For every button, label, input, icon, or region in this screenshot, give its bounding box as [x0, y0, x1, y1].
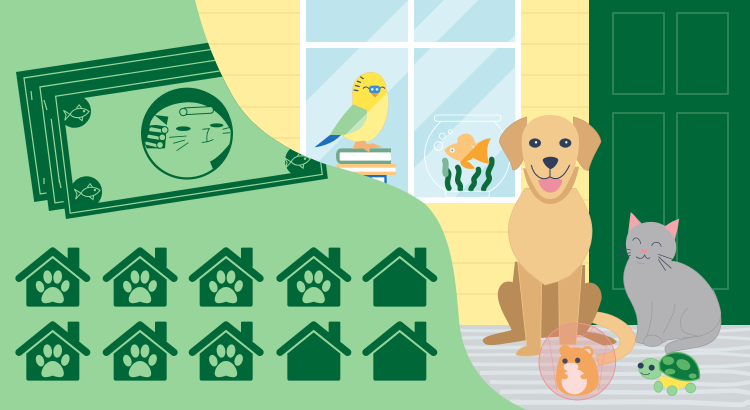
floor [440, 325, 750, 410]
turtle [638, 353, 700, 396]
legs [516, 262, 542, 356]
ball [539, 323, 616, 400]
plants [445, 159, 492, 189]
dollar bills [16, 32, 328, 219]
hamster ball [539, 323, 616, 400]
chest [508, 188, 592, 285]
books [336, 148, 396, 187]
tail [590, 312, 635, 366]
bird [314, 72, 388, 153]
cat medallion [141, 88, 233, 180]
house 2 with paw [106, 248, 174, 307]
house 1 with paw [19, 248, 87, 307]
window [300, 0, 521, 203]
house icons grid [19, 248, 434, 381]
bowl [425, 115, 510, 197]
cat [615, 212, 721, 354]
house 3 with paw [192, 248, 260, 307]
hamster [556, 345, 599, 396]
house 10 empty [366, 322, 434, 381]
house 4 with paw [280, 248, 348, 307]
back bill [16, 32, 296, 202]
head [522, 115, 579, 199]
goldfish [444, 134, 491, 169]
house 5 empty [366, 248, 434, 307]
budgie on books [314, 72, 396, 187]
house 7 with paw [106, 322, 174, 381]
green blob background [0, 0, 527, 410]
haunches [483, 262, 617, 346]
house 6 with paw [19, 322, 87, 381]
middle bill [39, 54, 308, 211]
house 8 with paw [192, 322, 260, 381]
face [529, 138, 571, 193]
ears [499, 117, 527, 170]
fish icon [63, 104, 90, 122]
fishbowl with goldfish [425, 115, 510, 197]
dog [483, 115, 635, 366]
bone marks [31, 91, 61, 188]
neck shade [523, 167, 579, 204]
front bill [55, 66, 328, 219]
house 9 empty [280, 322, 348, 381]
door [589, 0, 750, 326]
